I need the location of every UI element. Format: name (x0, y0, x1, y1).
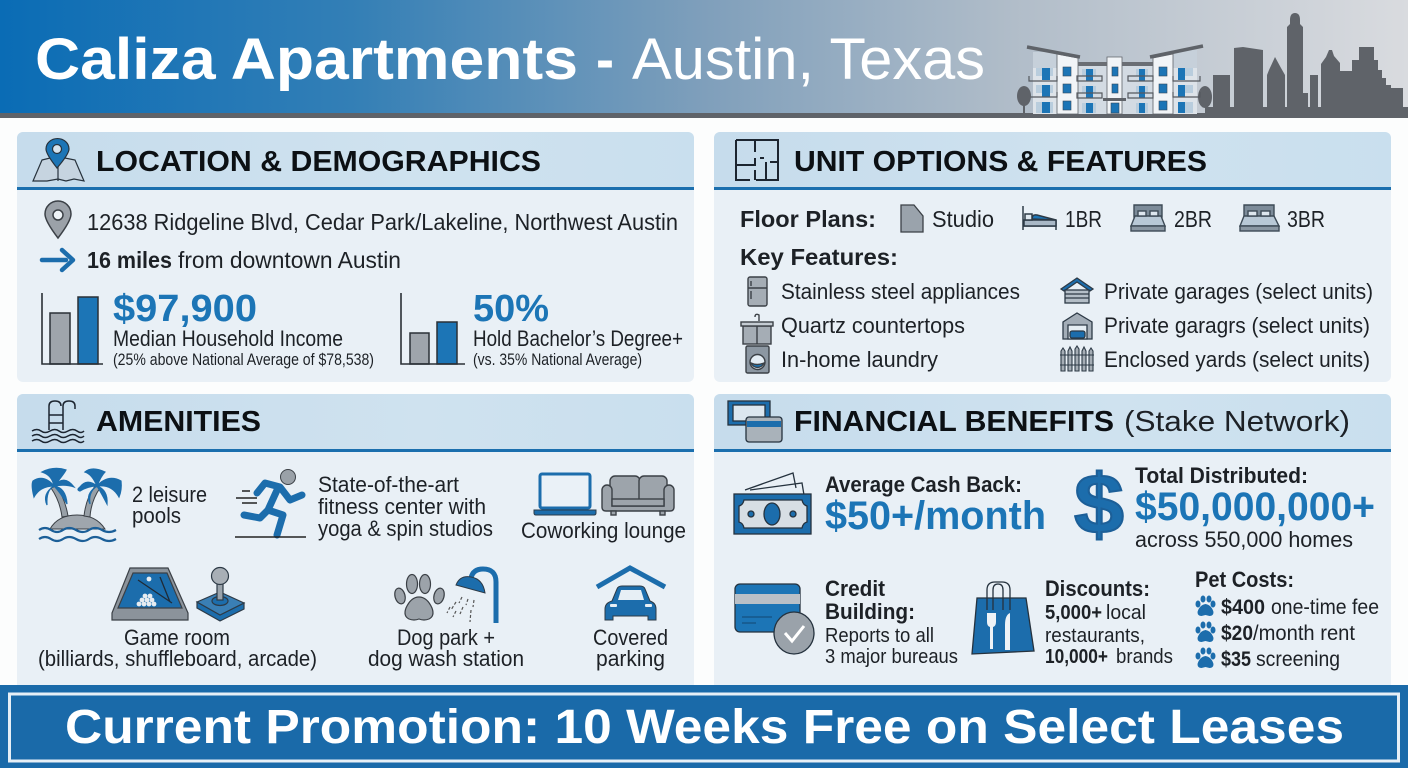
icon: banknote (734, 473, 811, 534)
skyline silhouette (1198, 13, 1408, 114)
promotion banner (0, 685, 1408, 768)
dog park text: dog wash station (368, 646, 524, 671)
icon: joystick (197, 568, 244, 621)
bar chart: income (42, 293, 103, 364)
feature: countertops: Quartz countertops (781, 313, 965, 338)
covered parking text: parking (596, 646, 665, 671)
icon: paw two (1196, 622, 1216, 642)
total distributed stat (1135, 463, 1375, 552)
icon: garage (1061, 278, 1093, 303)
heading: UNIT OPTIONS & FEATURES (794, 146, 1207, 178)
game room text: Game room (124, 625, 230, 650)
panel: unit options and features (714, 132, 1391, 382)
covered parking text (593, 625, 668, 671)
pet costs heading: Pet Costs: (1195, 567, 1294, 592)
panel: financial benefits (714, 394, 1391, 690)
address text: 12638 Ridgeline Blvd, Cedar Park/Lakeline, Northwest Austin (87, 209, 678, 235)
fitness text (318, 472, 493, 541)
icon: runner (235, 470, 306, 537)
pet rent text: /month rent (1253, 622, 1355, 645)
fitness text: State-of-the-art (318, 472, 459, 497)
coworking text: Coworking lounge (521, 518, 686, 543)
icon: floor plan (736, 140, 778, 180)
feature: appliances: Stainless steel appliances (781, 279, 1020, 304)
floor plans label: Floor Plans: (740, 206, 876, 232)
credit building text: Credit (825, 576, 886, 601)
pet screening text (1221, 648, 1340, 671)
icon: one bedroom (1023, 206, 1056, 230)
icon: credit card check (735, 584, 814, 654)
icon: paw three (1196, 648, 1216, 668)
credit building text: 3 major bureaus (825, 646, 958, 668)
pools text: 2 leisure (132, 482, 207, 507)
panel: location and demographics (17, 132, 694, 382)
icon: pool ladder (32, 401, 84, 442)
apartment building (1027, 46, 1203, 114)
studio label: Studio (932, 206, 994, 232)
education stat: Hold Bachelor’s Degree+ (473, 326, 683, 351)
total distributed stat: across 550,000 homes (1135, 527, 1353, 552)
discounts text: 5,000+ (1045, 602, 1102, 624)
discounts text: brands (1116, 646, 1173, 668)
dog park text (368, 625, 524, 671)
education stat (473, 288, 683, 369)
panel: amenities (17, 394, 694, 690)
heading: AMENITIES (96, 406, 261, 438)
cash back stat: $50+/month (825, 494, 1046, 538)
pet screening text: screening (1256, 648, 1340, 671)
fitness text: fitness center with (318, 494, 486, 519)
icon: sofa (602, 476, 674, 515)
credit building text: Reports to all (825, 625, 934, 647)
icon: countertop (741, 314, 773, 344)
icon: fence (1060, 346, 1094, 371)
icon: palm island (32, 468, 121, 541)
title: Caliza Apartments (35, 27, 578, 92)
game room text: (billiards, shuffleboard, arcade) (38, 646, 317, 671)
icon: billiards table (112, 568, 188, 620)
icon: shopping bag (972, 582, 1034, 654)
1BR label: 1BR (1065, 206, 1102, 232)
title: Austin, Texas (632, 27, 985, 92)
income stat: $97,900 (113, 288, 257, 330)
fitness text: yoga & spin studios (318, 516, 493, 541)
icon: laptop (534, 474, 596, 515)
icon: covered parking (597, 568, 665, 620)
pet screening text: $35 (1221, 648, 1251, 671)
covered parking text: Covered (593, 625, 668, 650)
feature: enclosed yards: Enclosed yards (select units) (1104, 347, 1370, 372)
icon: studio (901, 205, 923, 232)
icon: garage with car (1063, 313, 1092, 339)
education stat: (vs. 35% National Average) (473, 350, 642, 369)
heading (794, 406, 1350, 438)
icon: arrow (42, 250, 73, 270)
feature: private garages second: Private garagrs (select units) (1104, 313, 1370, 338)
credit building text: Building: (825, 599, 915, 624)
game room text (38, 625, 317, 671)
2BR label: 2BR (1174, 206, 1212, 232)
promotion banner: Current Promotion: 10 Weeks Free on Select Leases (65, 701, 1344, 754)
income stat (113, 288, 374, 369)
icon: address pin (45, 201, 71, 238)
3BR label: 3BR (1287, 206, 1325, 232)
pet fee text (1221, 596, 1379, 619)
distance text: 16 miles (87, 247, 172, 273)
feature: private garages: Private garages (select units) (1104, 279, 1373, 304)
discounts text: Discounts: (1045, 576, 1150, 601)
total distributed stat: Total Distributed: (1135, 463, 1308, 488)
income stat: Median Household Income (113, 326, 343, 351)
title (35, 27, 985, 92)
pet fee text: $400 (1221, 596, 1265, 619)
feature: laundry: In-home laundry (781, 347, 938, 372)
discounts text (1045, 576, 1173, 668)
icon: paw one (1196, 596, 1216, 616)
income stat: (25% above National Average of $78,538) (113, 350, 374, 369)
discounts text: local (1106, 602, 1146, 624)
discounts text: 10,000+ (1045, 646, 1108, 668)
icon: washer (746, 346, 769, 373)
key features label: Key Features: (740, 244, 898, 270)
pools text (132, 482, 207, 528)
pet rent text: $20 (1221, 622, 1253, 645)
icon: dollar sign: $ (1074, 457, 1124, 551)
cash back stat (825, 472, 1046, 538)
icon: refrigerator (748, 277, 767, 306)
icon: map pin (33, 139, 84, 181)
education stat: 50% (473, 288, 549, 330)
dog park text: Dog park + (397, 625, 495, 650)
pet fee text: one-time fee (1271, 596, 1379, 619)
icon: two bedroom (1131, 205, 1165, 231)
bar chart: education (401, 293, 465, 364)
heading: LOCATION & DEMOGRAPHICS (96, 146, 541, 178)
discounts text: restaurants, (1045, 625, 1145, 647)
icon: paw (393, 574, 446, 620)
total distributed stat: $50,000,000+ (1135, 485, 1375, 529)
tree (1017, 86, 1031, 114)
icon: three bedroom (1240, 205, 1279, 231)
heading: (Stake Network) (1124, 406, 1350, 438)
cash back stat: Average Cash Back: (825, 472, 1022, 497)
pools text: pools (132, 503, 181, 528)
credit building text (825, 576, 958, 668)
heading: FINANCIAL BENEFITS (794, 406, 1114, 438)
distance text: from downtown Austin (178, 247, 401, 273)
icon: cash and card (728, 401, 782, 442)
title: - (596, 27, 614, 92)
icon: shower (447, 569, 496, 623)
header banner (0, 0, 1408, 118)
